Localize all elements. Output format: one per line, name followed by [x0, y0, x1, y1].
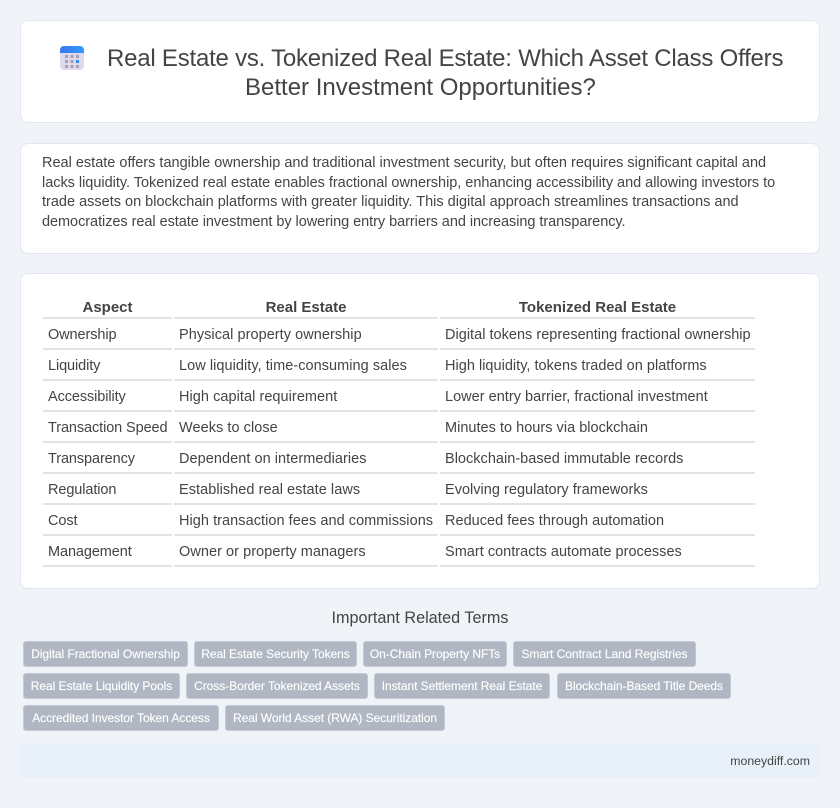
row: liquidity	[43, 358, 755, 381]
tags: related terms: Real Estate Security Tokens	[201, 647, 350, 661]
tags: related terms: Cross-Border Tokenized Assets	[194, 679, 360, 693]
tags: related terms: Smart Contract Land Registries	[522, 647, 687, 661]
footer	[20, 744, 820, 778]
text block: description: trade assets on blockchain platforms with greater liquidity. This digital approach streamlines transactions and	[42, 194, 739, 210]
row: regulation: Evolving regulatory frameworks	[445, 482, 648, 498]
row: accessibility: High capital requirement	[179, 389, 337, 405]
tags: related terms: Blockchain-Based Title Deeds	[565, 679, 723, 693]
title: Better Investment Opportunities?	[245, 74, 596, 101]
row: cost: Reduced fees through automation	[445, 513, 664, 529]
tags: related terms: Real World Asset (RWA) Securitization	[233, 711, 437, 725]
panel: description	[20, 143, 820, 254]
row: ownership	[43, 327, 755, 350]
tags: related terms: Real Estate Liquidity Pools	[31, 679, 172, 693]
text block: description: lacks liquidity. Tokenized real estate enables fractional ownership, enhancing accessibility and allowing investors to	[42, 175, 775, 191]
row: liquidity: Low liquidity, time-consuming sales	[179, 358, 407, 374]
row: transaction speed	[43, 420, 755, 443]
heading: related terms: Important Related Terms	[332, 609, 508, 627]
table header: Tokenized Real Estate	[519, 299, 676, 316]
row: accessibility	[43, 389, 755, 412]
tags: related terms: Accredited Investor Token Access	[32, 711, 210, 725]
footer source text: moneydiff.com	[730, 754, 810, 768]
row: ownership: Digital tokens representing fractional ownership	[445, 327, 751, 343]
tags: related terms	[23, 641, 731, 731]
panel: comparison table	[20, 273, 820, 589]
tags: related terms: Digital Fractional Ownership	[31, 647, 180, 661]
row: accessibility: Accessibility	[48, 389, 126, 405]
row: transparency: Transparency	[48, 451, 135, 467]
row: management: Owner or property managers	[179, 544, 366, 560]
panel: header	[20, 20, 820, 123]
row: transaction speed: Weeks to close	[179, 420, 278, 436]
row: transparency: Blockchain-based immutable records	[445, 451, 683, 467]
title	[107, 45, 783, 101]
tags: related terms: On-Chain Property NFTs	[370, 647, 500, 661]
row: liquidity: High liquidity, tokens traded on platforms	[445, 358, 707, 374]
row: cost: Cost	[48, 513, 77, 529]
row: regulation	[43, 482, 755, 505]
row: transaction speed: Transaction Speed	[48, 420, 167, 436]
table header: Real Estate	[266, 299, 346, 316]
row: management: Management	[48, 544, 132, 560]
text block: description	[42, 155, 775, 230]
row: management: Smart contracts automate processes	[445, 544, 682, 560]
row: regulation: Established real estate laws	[179, 482, 360, 498]
table header: Aspect	[82, 299, 133, 316]
row: cost	[43, 513, 755, 536]
row: ownership: Physical property ownership	[179, 327, 362, 343]
title: Real Estate vs. Tokenized Real Estate: Which Asset Class Offers	[107, 45, 783, 72]
row: accessibility: Lower entry barrier, fractional investment	[445, 389, 708, 405]
row: cost: High transaction fees and commissions	[179, 513, 433, 529]
tags: related terms: Instant Settlement Real Estate	[382, 679, 542, 693]
text block: description: democratizes real estate investment by lowering entry barriers and increasing transparency.	[42, 214, 626, 230]
row: transaction speed: Minutes to hours via blockchain	[445, 420, 648, 436]
text block: description: Real estate offers tangible ownership and traditional investment security, but often requires significant capital and	[42, 155, 766, 171]
row: ownership: Ownership	[48, 327, 116, 343]
row: liquidity: Liquidity	[48, 358, 100, 374]
row: transparency	[43, 451, 755, 474]
row: management	[43, 544, 755, 567]
row: regulation: Regulation	[48, 482, 116, 498]
table header	[43, 299, 755, 319]
row: transparency: Dependent on intermediaries	[179, 451, 367, 467]
icon: calendar	[60, 46, 84, 70]
